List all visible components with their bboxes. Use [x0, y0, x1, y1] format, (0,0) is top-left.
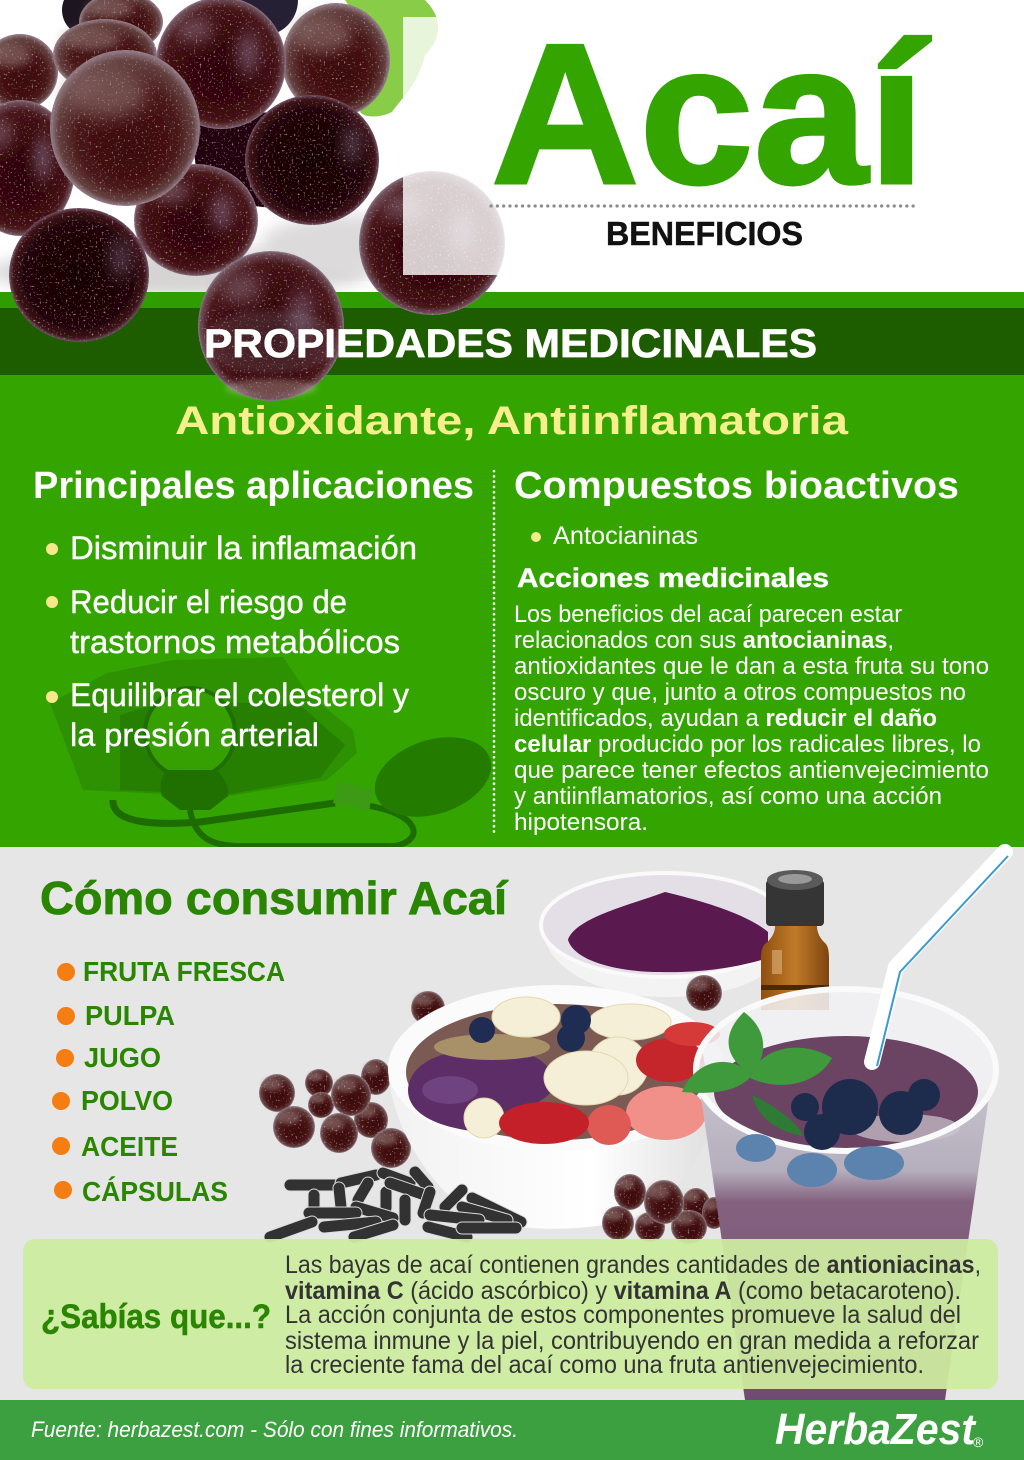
panel: how to consume background	[0, 847, 1024, 1400]
text block: medicinal actions: que parece tener efectos antienvejecimiento	[514, 757, 989, 784]
text block: medicinal actions	[514, 601, 989, 836]
logo: HerbaZest: HerbaZest	[775, 1405, 977, 1454]
text block: medicinal actions: y antiinflamatorios, así como una acción	[514, 783, 942, 810]
item: pulpa: PULPA	[85, 1000, 175, 1031]
item: jugo: JUGO	[84, 1042, 161, 1073]
list item: colesterol: la presión arterial	[70, 717, 319, 753]
list item: trastornos metabólicos: Reducir el riesgo de	[70, 584, 347, 620]
white haze panel behind title	[403, 17, 553, 275]
heading: compuestos bioactivos: Compuestos bioactivos	[514, 465, 959, 507]
text block: did you know: La acción conjunta de estos componentes promueve la salud del	[285, 1301, 961, 1329]
submerged blueberries	[736, 1134, 904, 1187]
dark banner	[0, 308, 1024, 375]
text block: medicinal actions: Los beneficios del acaí parecen estar	[514, 601, 902, 628]
icon: acai capsules	[270, 1172, 521, 1237]
text block: medicinal actions: oscuro y que, junto a otros compuestos no	[514, 679, 966, 706]
icon: acai berries overlapping banner	[9, 171, 505, 401]
list item: trastornos metabólicos	[46, 584, 400, 660]
blueberries	[469, 1005, 591, 1052]
item: capsulas: CÁPSULAS	[82, 1176, 228, 1207]
banner heading: PROPIEDADES MEDICINALES	[204, 322, 817, 366]
panel: did you know	[23, 1239, 998, 1389]
top blueberries	[791, 1079, 940, 1150]
text block: did you know: Las bayas de acaí contienen grandes cantidades de antioniacinas,	[285, 1251, 981, 1279]
banana slices	[464, 997, 671, 1138]
icon: acai bowl with fruit	[388, 985, 726, 1229]
text block: did you know: la creciente fama del acaí como una fruta antienvejecimiento.	[285, 1351, 924, 1379]
icon: loose acai berries	[259, 975, 722, 1168]
logo: HerbaZest: ®	[973, 1434, 984, 1450]
text block: medicinal actions: celular producido por los radicales libres, lo	[514, 731, 981, 758]
heading: acciones medicinales: Acciones medicinales	[517, 563, 829, 593]
properties heading: Antioxidante, Antiinflamatoria	[175, 399, 849, 443]
icon: blood pressure monitor watermark	[50, 657, 501, 846]
dotted divider	[491, 204, 915, 208]
panel: bioactive compounds	[514, 465, 989, 836]
list item: colesterol	[46, 677, 409, 753]
source note: Fuente: herbazest.com - Sólo con fines informativos.	[31, 1417, 518, 1442]
heading: como consumir: Cómo consumir Acaí	[40, 872, 509, 924]
footer	[0, 1400, 1024, 1460]
mint leaves	[682, 1012, 832, 1136]
list: forms of consumption	[52, 956, 285, 1207]
text block: medicinal actions: relacionados con sus antocianinas,	[514, 627, 894, 654]
granola	[434, 1034, 550, 1060]
text block: did you know: vitamina C (ácido ascórbico) y vitamina A (como betacaroteno).	[285, 1277, 961, 1305]
list item: trastornos metabólicos: trastornos metabólicos	[70, 624, 400, 660]
icon: bowl of acai powder	[541, 873, 790, 997]
icon: lower acai berries	[602, 1174, 726, 1244]
list item: antocianinas: Antocianinas	[553, 522, 698, 550]
panel: header photo of acai berries	[0, 0, 440, 296]
heading: principales aplicaciones: Principales aplicaciones	[33, 465, 474, 507]
subtitle: BENEFICIOS	[606, 215, 803, 252]
acai cream	[408, 1050, 554, 1132]
list item: inflamación: Disminuir la inflamación	[70, 530, 417, 566]
item: fruta fresca: FRUTA FRESCA	[83, 956, 285, 987]
straw	[872, 852, 1005, 1062]
strawberries	[499, 1022, 720, 1145]
icon: smoothie cup with straw	[682, 852, 1008, 1400]
text block: medicinal actions: antioxidantes que le dan a esta fruta su tono	[514, 653, 989, 680]
item: polvo: POLVO	[81, 1085, 173, 1116]
green strip	[0, 292, 1024, 376]
item: aceite: ACEITE	[81, 1131, 178, 1162]
text block: did you know	[285, 1251, 981, 1379]
text block: medicinal actions: identificados, ayudan a reducir el daño	[514, 705, 937, 732]
text block: did you know: sistema inmune y la piel, contribuyendo en gran medida a reforzar	[285, 1327, 979, 1355]
column divider	[493, 471, 495, 832]
icon: oil bottle	[761, 870, 829, 1010]
panel: principal applications	[33, 465, 474, 753]
text block: medicinal actions: hipotensora.	[514, 809, 648, 836]
title: Acaí	[491, 3, 931, 226]
list item: colesterol: Equilibrar el colesterol y	[70, 677, 409, 713]
panel: main green section background	[0, 375, 1024, 847]
heading: sabias que: ¿Sabías que...?	[41, 1298, 271, 1336]
